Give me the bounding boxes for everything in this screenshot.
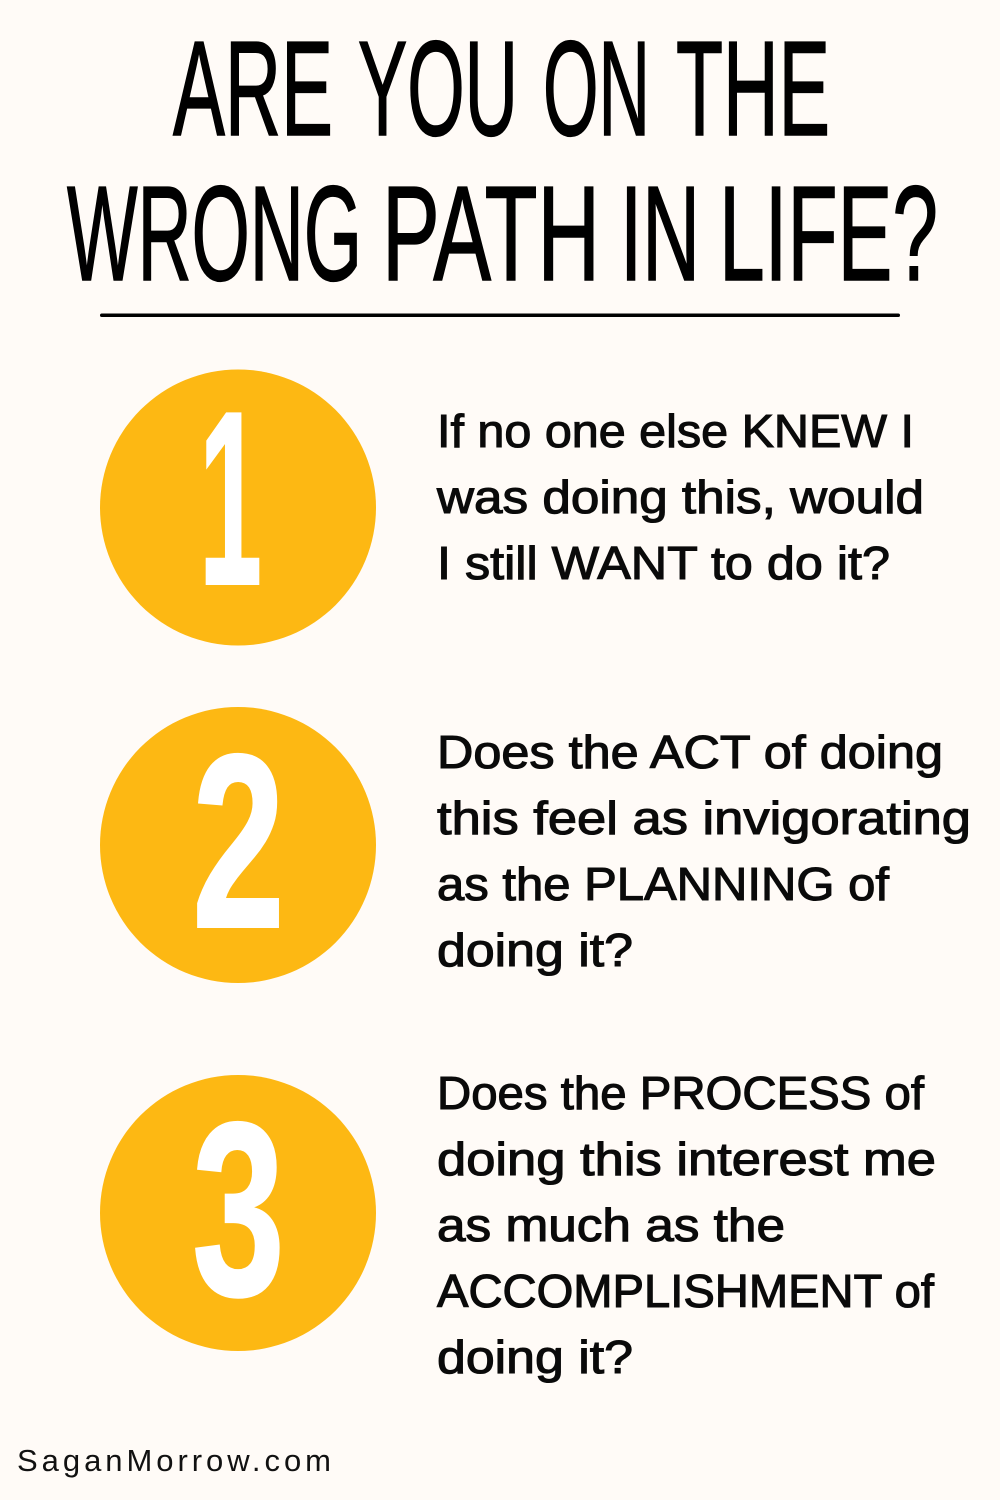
title: THE — [676, 13, 830, 164]
title: PATH — [382, 158, 600, 309]
title: ARE — [173, 13, 333, 164]
footer website credit: SaganMorrow.com — [17, 1443, 331, 1478]
icon: number 1 badge — [100, 359, 376, 646]
icon: number 3 badge — [100, 1070, 376, 1351]
text: question 3: as much as the — [437, 1199, 785, 1251]
text: question 2 — [437, 726, 971, 976]
title — [67, 13, 938, 309]
title: ON — [543, 13, 650, 164]
icon: number 3 badge: 3 — [192, 1070, 285, 1348]
text: question 3: Does the PROCESS of — [437, 1067, 924, 1119]
panel: question 1 — [100, 359, 924, 646]
panel: question 3 — [100, 1067, 936, 1383]
title: YOU — [358, 13, 518, 164]
panel: question 2 — [100, 702, 971, 983]
text: question 1 — [436, 405, 924, 589]
title: IN — [620, 158, 700, 309]
text: question 3: doing it? — [437, 1331, 633, 1383]
text: question 1: I still WANT to do it? — [437, 537, 890, 589]
icon: number 2 badge — [100, 702, 376, 983]
text: question 3: ACCOMPLISHMENT of — [437, 1265, 934, 1317]
text: question 1: If no one else KNEW I — [437, 405, 914, 457]
text: question 2: Does the ACT of doing — [437, 726, 943, 778]
text: question 2: doing it? — [437, 924, 633, 976]
text: question 3 — [437, 1067, 936, 1383]
text: question 2: as the PLANNING of — [437, 858, 889, 910]
text: question 1: was doing this, would — [436, 471, 924, 523]
title underline — [100, 314, 900, 317]
title: WRONG — [67, 158, 362, 309]
text: question 2: this feel as invigorating — [437, 792, 971, 844]
icon: number 1 badge: 1 — [199, 359, 262, 637]
icon: number 2 badge: 2 — [192, 702, 285, 980]
text: question 3: doing this interest me — [437, 1133, 936, 1185]
